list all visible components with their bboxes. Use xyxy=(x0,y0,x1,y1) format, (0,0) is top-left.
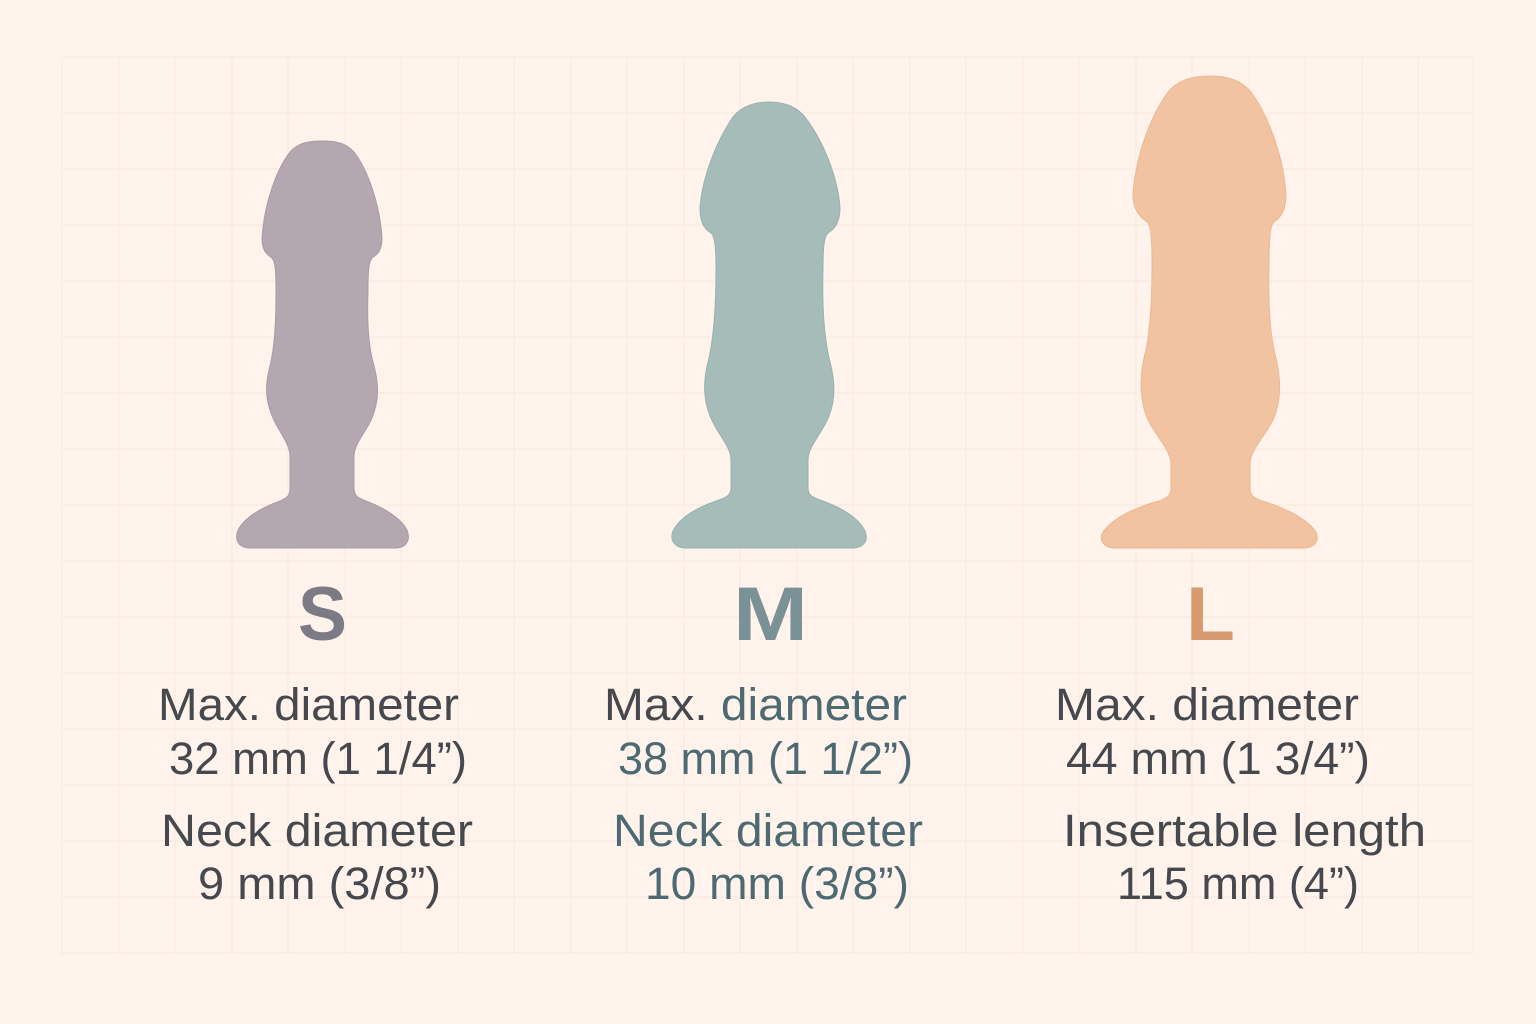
text block: L specifications xyxy=(1055,679,1426,909)
text block: M specifications: Neck diameter xyxy=(613,805,923,856)
text block: S specifications: 32 mm (1 1/4”) xyxy=(169,733,467,784)
text block: M specifications: 38 mm (1 1/2”) xyxy=(618,733,913,784)
icon: large size silhouette xyxy=(1101,76,1317,548)
size label S: S xyxy=(298,572,347,657)
text block: S specifications: 9 mm (3/8”) xyxy=(198,858,441,909)
size label M: M xyxy=(733,572,808,657)
icon: medium size silhouette xyxy=(672,102,866,548)
text block: M specifications: Max. diameter xyxy=(604,679,907,730)
text block: S specifications: Max. diameter xyxy=(158,679,459,730)
text block: L specifications: Max. diameter xyxy=(1055,679,1359,730)
icon: small size silhouette xyxy=(237,141,408,548)
text block: S specifications xyxy=(158,679,473,909)
text block: L specifications: 115 mm (4”) xyxy=(1117,858,1359,909)
text block: L specifications: 44 mm (1 3/4”) xyxy=(1066,733,1370,784)
text block: M specifications xyxy=(604,679,923,909)
text block: S specifications: Neck diameter xyxy=(161,805,473,856)
size label L: L xyxy=(1186,572,1235,657)
text block: M specifications: 10 mm (3/8”) xyxy=(645,858,909,909)
text block: L specifications: Insertable length xyxy=(1063,805,1426,856)
